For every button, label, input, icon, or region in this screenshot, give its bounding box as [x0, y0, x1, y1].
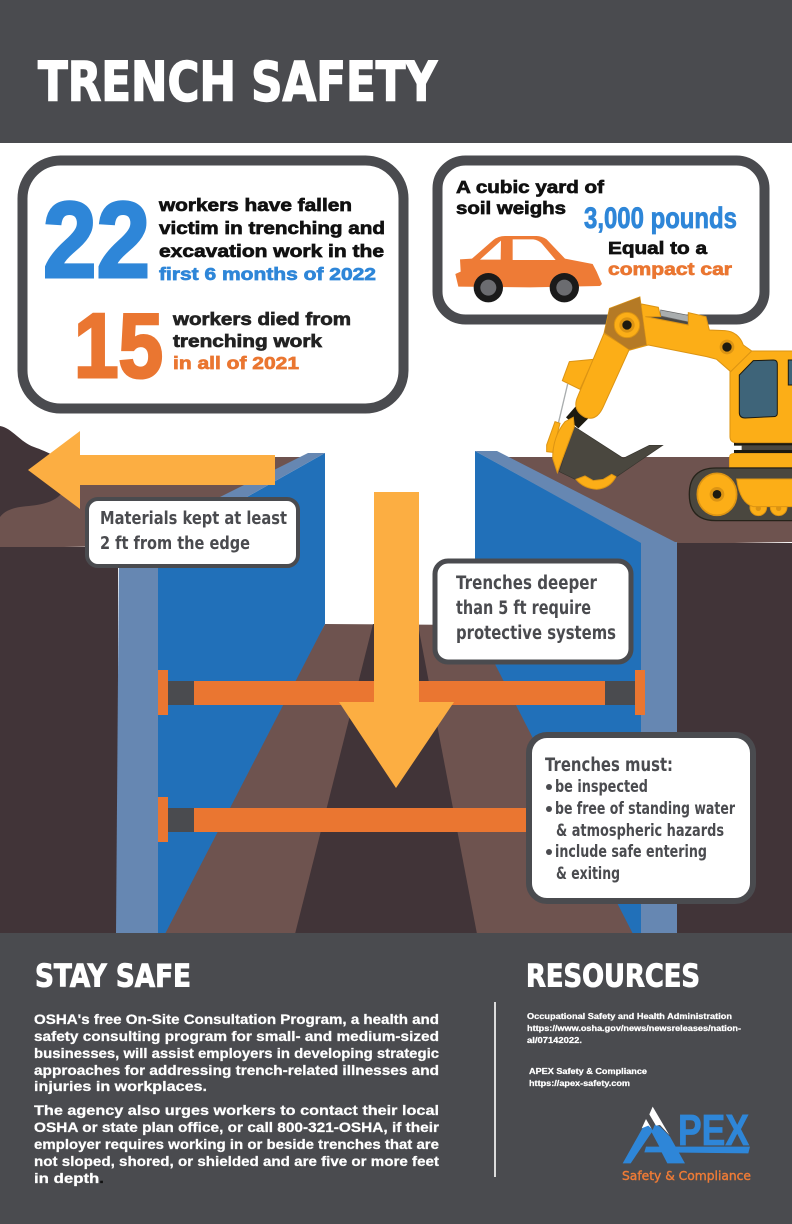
text: stay safe paragraph two: in depth . — [34, 1171, 104, 1186]
statistic 22 description: workers have fallen — [158, 195, 352, 215]
compact car comparison: compact car — [608, 259, 732, 279]
logo: APEX Safety & Compliance: PEX — [678, 1106, 749, 1155]
logo: APEX Safety & Compliance: Safety & Compliance — [622, 1169, 751, 1183]
arrow: down — [339, 492, 454, 788]
statistic 15 description: workers died from — [172, 309, 351, 329]
lower cross brace — [158, 797, 534, 842]
icon: excavator — [547, 297, 792, 521]
heading: stay safe: STAY SAFE — [35, 958, 191, 994]
trench scene — [0, 426, 792, 934]
callout: materials: Materials kept at least — [100, 508, 287, 529]
icon: car — [455, 236, 602, 302]
checklist: be inspected — [555, 777, 648, 796]
text: stay safe paragraph one: safety consulting program for small- and medium-sized — [34, 1029, 439, 1044]
right soil wall — [677, 543, 792, 934]
header band — [0, 0, 792, 143]
statistic 22 description: excavation work in the — [159, 241, 384, 261]
logo: APEX Safety & Compliance — [622, 1106, 751, 1183]
callout: materials: 2 ft from the edge — [100, 533, 250, 554]
text: OSHA source: https://www.osha.gov/news/newsreleases/nation- — [527, 1024, 741, 1033]
3,000 pounds: 3,000 pounds — [584, 202, 737, 235]
text: OSHA source: al/07142022. — [527, 1036, 582, 1045]
compact car comparison: Equal to a — [608, 238, 707, 258]
arrow: left — [28, 431, 275, 509]
statistic 22 description: first 6 months of 2022 — [159, 264, 376, 284]
text: stay safe paragraph one: OSHA's free On-Site Consultation Program, a health and — [34, 1012, 439, 1027]
statistic: 22: 22 — [43, 179, 150, 300]
title: TRENCH SAFETY — [38, 50, 438, 113]
left soil wall — [0, 547, 118, 934]
callout: protective systems: than 5 ft require — [456, 598, 591, 619]
text: stay safe paragraph one: approaches for addressing trench-related illnesses and — [34, 1063, 439, 1078]
checklist: be free of standing water — [555, 799, 736, 818]
statistic 15 description — [172, 309, 351, 373]
text: OSHA source — [527, 1012, 741, 1045]
trench floor — [150, 624, 660, 934]
callout: protective systems: Trenches deeper — [456, 573, 598, 594]
callout: materials — [87, 499, 298, 566]
callout: protective systems — [435, 561, 631, 662]
text: stay safe paragraph two: The agency also urges workers to contact their local — [34, 1103, 439, 1118]
statistic 15 description: in all of 2021 — [173, 353, 299, 373]
statistic 22 description — [158, 195, 385, 284]
text: stay safe paragraph one: businesses, will assist employers in developing strategic — [34, 1046, 440, 1061]
left trench shield — [116, 453, 325, 934]
text: APEX source: APEX Safety & Compliance — [529, 1067, 648, 1076]
text: stay safe paragraph one: injuries in workplaces. — [34, 1079, 207, 1094]
text: APEX source — [529, 1067, 648, 1088]
statistic 15 description: trenching work — [173, 331, 322, 351]
soil pile — [0, 426, 75, 517]
right ground surface — [505, 457, 792, 544]
text: stay safe paragraph two: not sloped, shored, or shielded and are five or more feet — [34, 1154, 440, 1169]
text: stay safe paragraph two — [34, 1103, 440, 1186]
checklist: & atmospheric hazards — [556, 821, 724, 840]
panel: worker statistics — [22, 160, 404, 408]
logo mark — [623, 1107, 750, 1163]
statistic 22 description: victim in trenching and — [159, 218, 385, 238]
footer band — [0, 933, 792, 1224]
heading: resources: RESOURCES — [526, 958, 700, 994]
text: stay safe paragraph two: OSHA or state plan office, or call 800-321-OSHA, if their — [34, 1120, 440, 1135]
text: OSHA source: Occupational Safety and Health Administration — [527, 1012, 732, 1021]
callout: trenches must — [529, 735, 753, 901]
callout: trenches must: Trenches must: — [545, 755, 673, 776]
soil weight text: A cubic yard of — [456, 177, 604, 197]
text: APEX source: https://apex-safety.com — [529, 1079, 630, 1088]
text: stay safe paragraph one — [34, 1012, 440, 1094]
soil weight text: soil weighs — [456, 198, 566, 218]
compact car comparison — [608, 238, 732, 279]
text: stay safe paragraph two: employer requires working in or beside trenches that are — [34, 1137, 440, 1152]
callout: protective systems: protective systems — [456, 623, 616, 644]
checklist — [546, 777, 736, 883]
statistic: 15: 15 — [74, 296, 163, 397]
panel: soil weight — [438, 160, 764, 320]
checklist: include safe entering — [555, 842, 707, 861]
soil weight text — [456, 177, 604, 218]
checklist: & exiting — [556, 864, 620, 883]
left ground surface — [0, 457, 312, 548]
right trench shield — [475, 451, 677, 934]
upper cross brace — [158, 670, 645, 715]
